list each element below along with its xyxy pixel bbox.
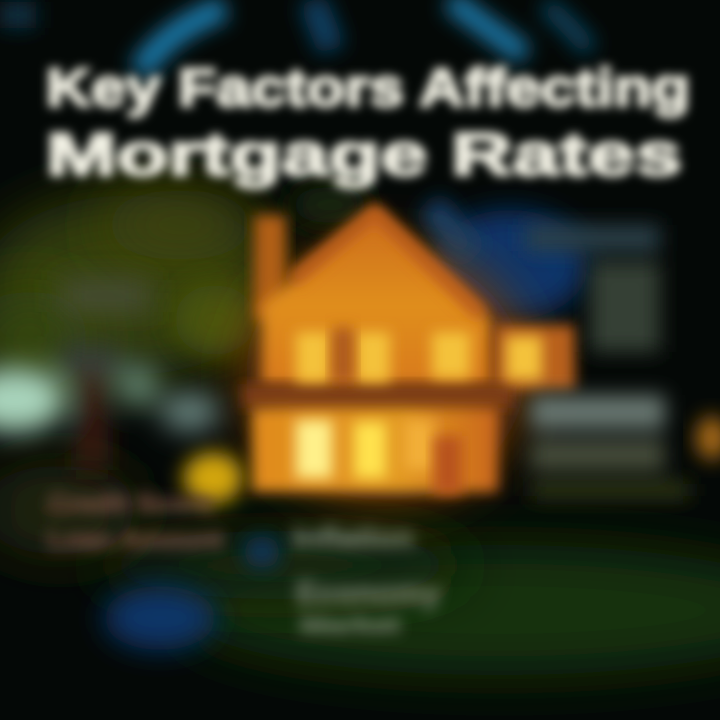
bottom centre caption text: Inflation [292,522,414,553]
left caption text: Loan Amount [48,524,223,554]
sky arcs: blue light streaks [0,0,590,255]
house: chimney [254,215,286,320]
bottom centre caption text: Economy [296,575,441,611]
bottom centre caption text [292,522,441,637]
house: side wing [495,325,575,390]
title: Key Factors Affecting [46,58,690,118]
left factor block: white glow foliage [0,280,220,470]
right factor block [525,225,690,498]
yellow garden light [183,452,243,504]
house: glow [245,250,525,500]
house: lower windows [296,420,434,478]
house: roof edge [292,212,482,315]
blue pool [104,586,216,650]
small blue accent [244,536,280,568]
house: upper door [332,328,354,382]
bottom centre caption text: Market [300,615,401,637]
left caption text [48,488,223,554]
title [46,58,690,188]
left caption text: Credit Score [48,488,213,518]
house: balcony band [242,384,512,408]
house: upper storey and roof [262,208,490,385]
house: front door [434,436,462,494]
title: Mortgage Rates [46,121,682,188]
house: lower storey [252,408,498,492]
house: upper windows [296,332,542,382]
house [242,208,575,500]
right edge light [696,416,720,460]
